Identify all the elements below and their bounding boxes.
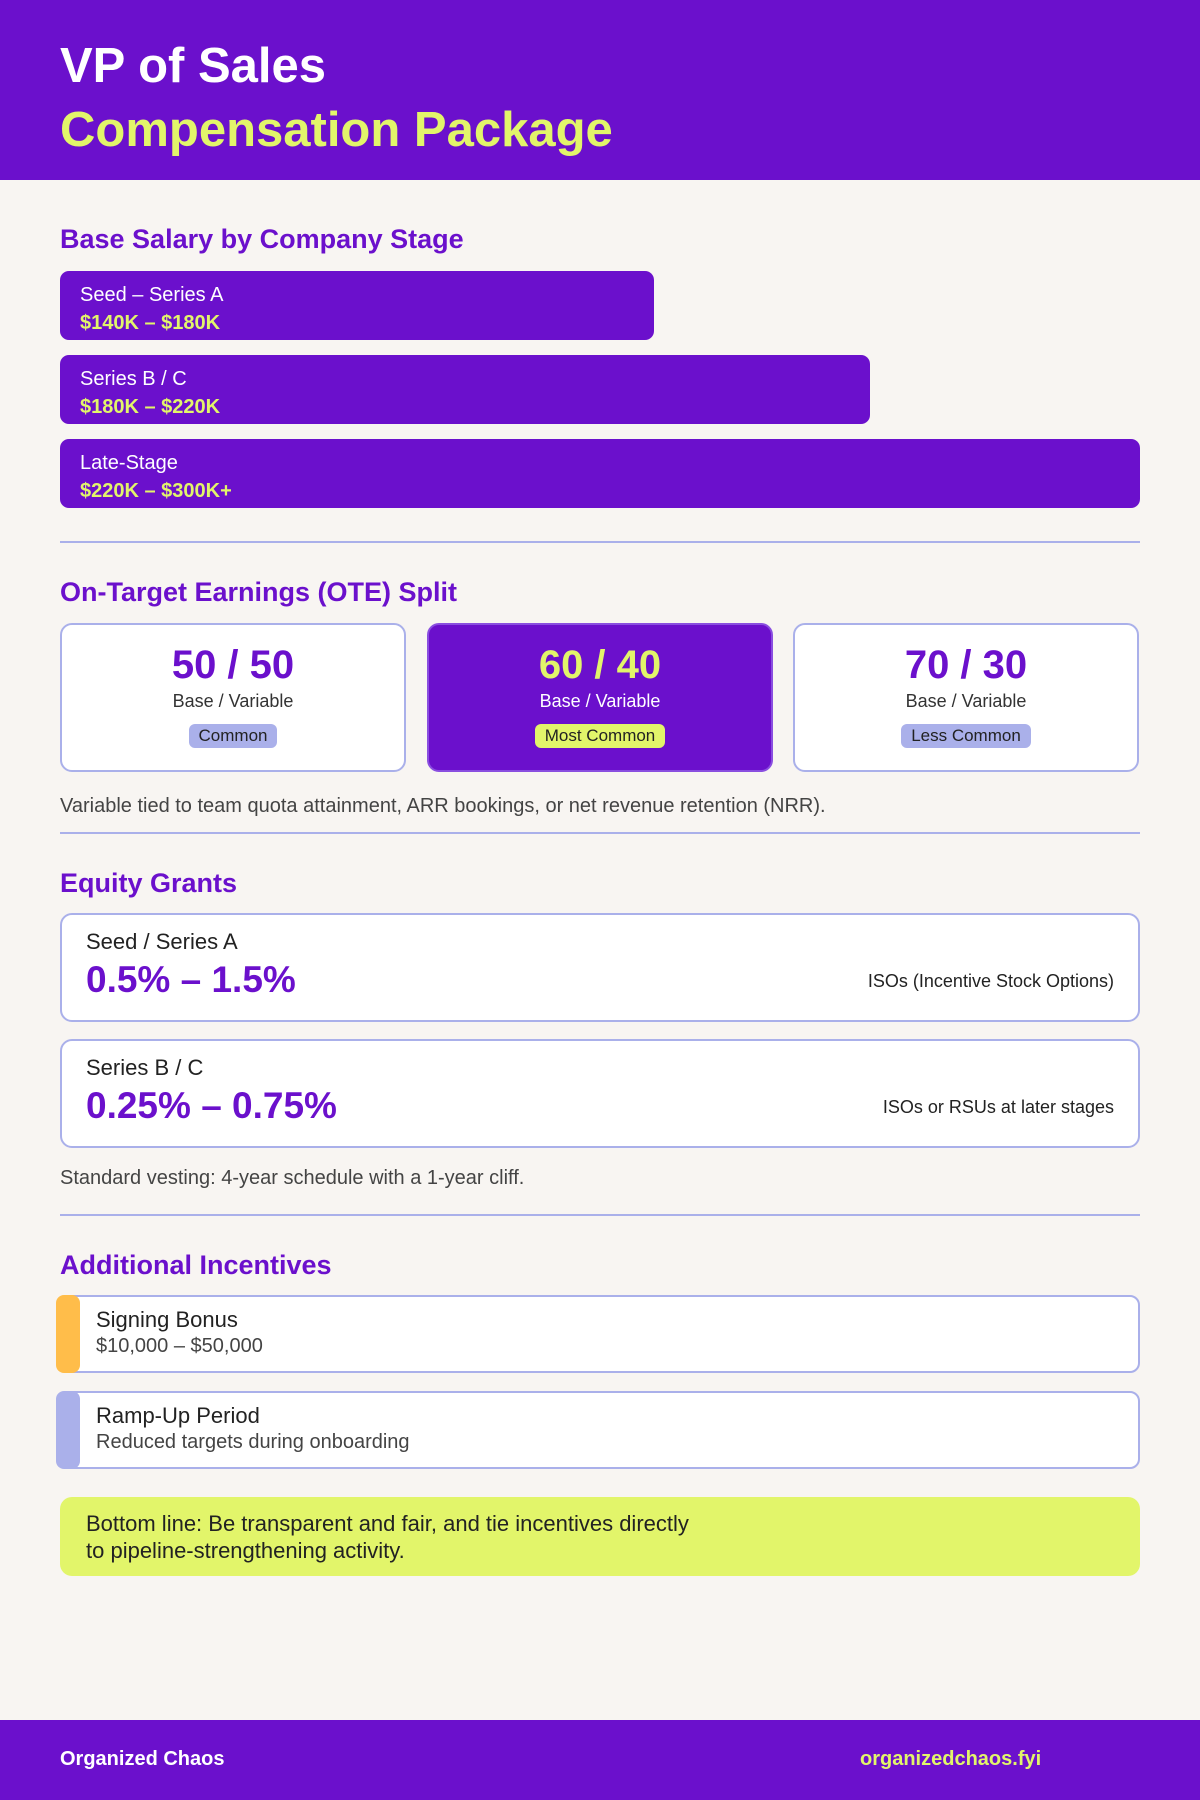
- card: 50/50: [60, 623, 406, 772]
- card: 70/30: [793, 623, 1139, 772]
- incentive: ramp: Ramp-Up Period: [96, 1403, 260, 1428]
- callout: bottom line: to pipeline-strengthening activity.: [86, 1538, 405, 1563]
- callout: bottom line: [60, 1497, 1140, 1576]
- note: vesting: Standard vesting: 4-year schedule with a 1-year cliff.: [60, 1167, 524, 1189]
- heading: base salary: Base Salary by Company Stage: [60, 224, 464, 254]
- incentive: ramp: [60, 1391, 1140, 1469]
- heading: incentives: Additional Incentives: [60, 1250, 332, 1280]
- bar: seed: Seed – Series A: [80, 284, 223, 306]
- note: variable: Variable tied to team quota attainment, ARR bookings, or net revenue retention (NRR).: [60, 795, 826, 817]
- footer url: organizedchaos.fyi: [860, 1748, 1041, 1770]
- title: [60, 39, 613, 157]
- bar: series b/c: $180K – $220K: [80, 396, 220, 418]
- bar: seed: [60, 271, 654, 340]
- card: 60/40: [427, 623, 773, 772]
- incentive: ramp: Reduced targets during onboarding: [96, 1431, 410, 1453]
- title: Compensation Package: [60, 103, 613, 157]
- card: 70/30: Less Common: [911, 726, 1021, 745]
- bar: late: Late-Stage: [80, 452, 178, 474]
- card: 70/30: Base / Variable: [906, 691, 1026, 711]
- bar: late: $220K – $300K+: [80, 480, 232, 502]
- equity: series b: 0.25% – 0.75%: [86, 1085, 337, 1126]
- card: 70/30: 70 / 30: [905, 643, 1027, 687]
- incentive: signing: Signing Bonus: [96, 1307, 238, 1332]
- incentive: signing: $10,000 – $50,000: [96, 1335, 263, 1357]
- equity: seed: Seed / Series A: [86, 929, 238, 954]
- title: VP of Sales: [60, 39, 326, 93]
- card: 50/50: 50 / 50: [172, 643, 294, 687]
- incentive: signing: [60, 1295, 1140, 1373]
- footer: [0, 1720, 1200, 1800]
- equity: seed: ISOs (Incentive Stock Options): [868, 971, 1114, 991]
- callout: bottom line: Bottom line: Be transparent and fair, and tie incentives directly: [86, 1511, 689, 1536]
- heading: OTE: On-Target Earnings (OTE) Split: [60, 577, 457, 607]
- equity: seed: 0.5% – 1.5%: [86, 959, 296, 1000]
- bar: late: [60, 439, 1140, 508]
- card: 60/40: Most Common: [545, 726, 655, 745]
- bar: series b/c: Series B / C: [80, 368, 187, 390]
- card: 50/50: Base / Variable: [173, 691, 293, 711]
- footer brand: Organized Chaos: [60, 1748, 224, 1770]
- equity: series b: Series B / C: [86, 1055, 203, 1080]
- bar: seed: $140K – $180K: [80, 312, 220, 334]
- equity: series b: ISOs or RSUs at later stages: [883, 1097, 1114, 1117]
- equity: series b: [60, 1039, 1140, 1148]
- bar: series b/c: [60, 355, 870, 424]
- card: 60/40: 60 / 40: [539, 643, 661, 687]
- heading: equity: Equity Grants: [60, 868, 237, 898]
- card: 50/50: Common: [199, 726, 267, 745]
- card: 60/40: Base / Variable: [540, 691, 660, 711]
- equity: seed: [60, 913, 1140, 1022]
- header: [0, 0, 1200, 180]
